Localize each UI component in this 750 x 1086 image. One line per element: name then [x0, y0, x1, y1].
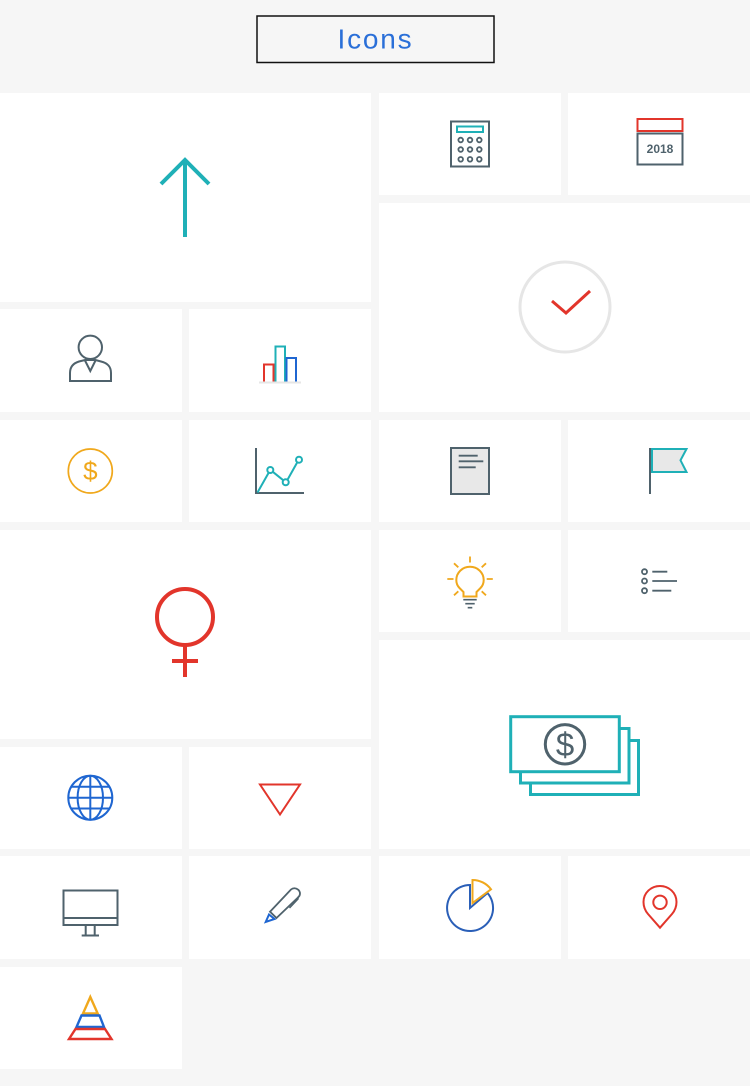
icon: pie chart — [447, 880, 493, 931]
panel: arrow up — [0, 93, 371, 302]
icon: down triangle — [260, 784, 300, 814]
panel: dollar coin — [0, 420, 182, 522]
panel: pyramid — [0, 967, 182, 1069]
icon: person — [70, 336, 111, 381]
panel: monitor — [0, 856, 182, 959]
panel: calculator — [379, 93, 561, 195]
icon: bar chart — [259, 346, 301, 382]
panel: map pin — [568, 856, 750, 959]
panel: check mark — [379, 203, 750, 412]
icon: map pin — [644, 886, 676, 928]
panel: flag — [568, 420, 750, 522]
icon: calendar 2018 — [638, 119, 682, 164]
icon: pyramid — [69, 997, 112, 1039]
panel: document — [379, 420, 561, 522]
panel: line chart — [189, 420, 371, 522]
icon: venus symbol — [157, 589, 213, 677]
panel: pie chart — [379, 856, 561, 959]
icon: flag — [650, 448, 686, 494]
icon: calendar 2018: 2018 — [647, 142, 674, 156]
panel: list — [568, 530, 750, 632]
icon: line chart — [256, 448, 304, 493]
panel: venus symbol — [0, 530, 371, 739]
icon: arrow up — [161, 160, 209, 237]
icon: dollar coin: $ — [83, 456, 98, 486]
icon: check in circle — [520, 262, 610, 352]
icon: dollar coin — [68, 449, 112, 493]
panel: bar chart — [189, 309, 371, 412]
panel: triangle — [189, 747, 371, 849]
panel: pen — [189, 856, 371, 959]
icon: calculator — [451, 122, 489, 166]
icon: pen — [266, 888, 300, 922]
panel: light bulb — [379, 530, 561, 632]
icon: globe — [68, 776, 112, 820]
icon: monitor — [64, 890, 118, 936]
icon: light bulb — [447, 556, 493, 608]
title: Icons — [338, 24, 413, 54]
panel: globe — [0, 747, 182, 849]
panel: calendar — [568, 93, 750, 195]
icon: document — [451, 448, 489, 494]
icon: banknotes: $ — [556, 726, 574, 763]
panel: person — [0, 309, 182, 412]
icon: list — [642, 569, 677, 593]
icon: banknotes — [511, 717, 638, 794]
title — [257, 16, 494, 62]
panel: money — [379, 640, 750, 849]
